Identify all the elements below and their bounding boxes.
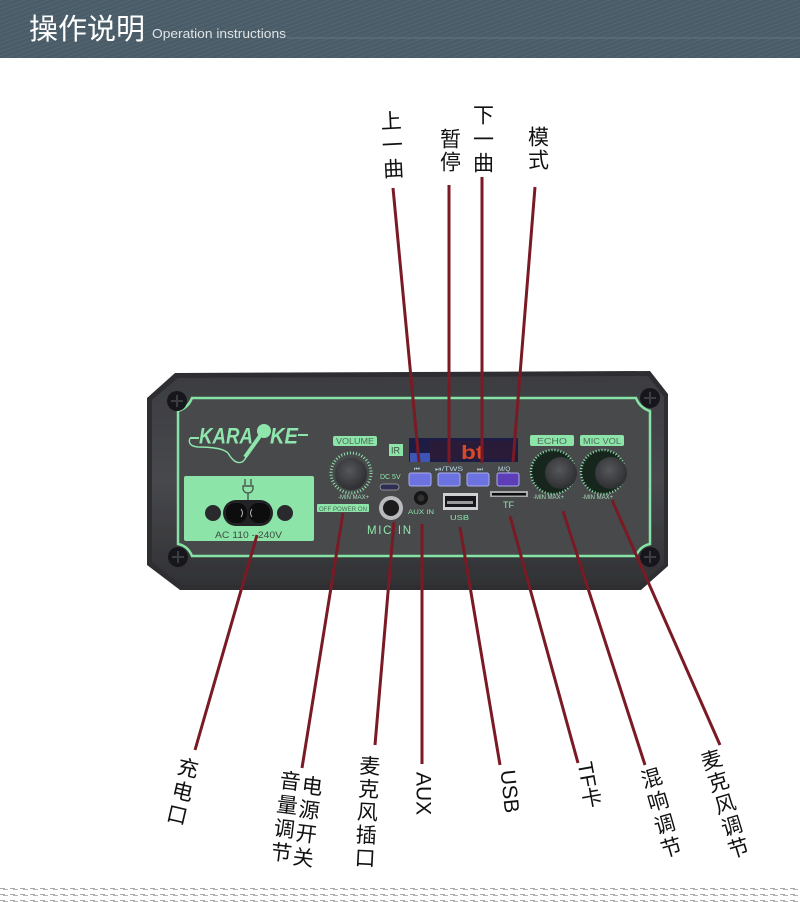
- mic jack: MIC IN: [367, 525, 411, 537]
- green frame: [178, 398, 650, 556]
- echo control: ECHO: [537, 436, 567, 446]
- label: tf card: TF卡: [573, 760, 604, 810]
- mic volume control: [580, 435, 627, 501]
- mic jack: [367, 496, 411, 537]
- button labels: ⏭: [477, 466, 483, 473]
- echo control: [530, 435, 577, 501]
- label: charging port: 充电口: [162, 754, 200, 830]
- logo: karaoke: KARA: [199, 424, 253, 448]
- label: previous track: 上一曲: [378, 109, 405, 183]
- corner screws: [167, 388, 660, 567]
- dc port: DC 5V: [380, 474, 401, 481]
- heading: 操作说明: [29, 13, 145, 46]
- led display: bt: [461, 443, 485, 464]
- button labels: [414, 466, 510, 473]
- label: aux: AUX: [412, 772, 434, 815]
- label: mode: 模式: [526, 126, 549, 172]
- label: pause: 暂停: [438, 128, 461, 174]
- subtitle: Operation instructions: [152, 27, 286, 41]
- label: reverb adjustment: 混响调节: [636, 765, 685, 863]
- volume control: -MIN MAX+: [338, 495, 370, 501]
- volume control: OFF POWER ON: [319, 506, 367, 513]
- power socket: [223, 500, 273, 526]
- panel shell: [147, 371, 668, 590]
- button labels: ⏯/TWS: [435, 466, 464, 473]
- header banner: [0, 0, 800, 58]
- led display: [409, 438, 518, 464]
- logo: karaoke: [189, 424, 308, 463]
- ir label: [389, 444, 403, 456]
- leader lines: [195, 177, 720, 768]
- mic volume control: MIC VOL: [583, 436, 621, 446]
- mic volume control: -MIN MAX+: [582, 495, 614, 501]
- tf slot: [490, 491, 528, 510]
- echo control: -MIN MAX+: [533, 495, 565, 501]
- footer dashed band: [0, 888, 800, 902]
- aux jack: AUX IN: [408, 509, 434, 516]
- media buttons: [409, 473, 519, 486]
- tf slot: TF: [503, 500, 514, 510]
- aux jack: [408, 491, 434, 516]
- button labels: M/Q: [498, 466, 510, 473]
- dc port: [380, 474, 401, 490]
- usb port: [443, 493, 478, 522]
- label: power switch: 电源开关: [289, 774, 324, 872]
- label: mic adjustment: 麦克风调节: [696, 746, 752, 863]
- usb port: USB: [450, 513, 469, 522]
- label: volume adjustment: 音量调节: [267, 769, 302, 867]
- volume control: VOLUME: [336, 436, 374, 446]
- green power box: [184, 476, 314, 541]
- control panel photo: [147, 371, 668, 590]
- green power box: AC 110 - 240V: [215, 530, 282, 540]
- label: usb: USB: [496, 769, 523, 814]
- button labels: ⏮: [414, 466, 420, 473]
- ir label: IR: [391, 446, 401, 456]
- plug icon: [243, 479, 253, 500]
- volume control: [317, 436, 377, 513]
- label: next track: 下一曲: [470, 104, 494, 176]
- logo: karaoke: KE: [270, 424, 299, 448]
- label: mic jack: 麦克风插口: [351, 754, 381, 870]
